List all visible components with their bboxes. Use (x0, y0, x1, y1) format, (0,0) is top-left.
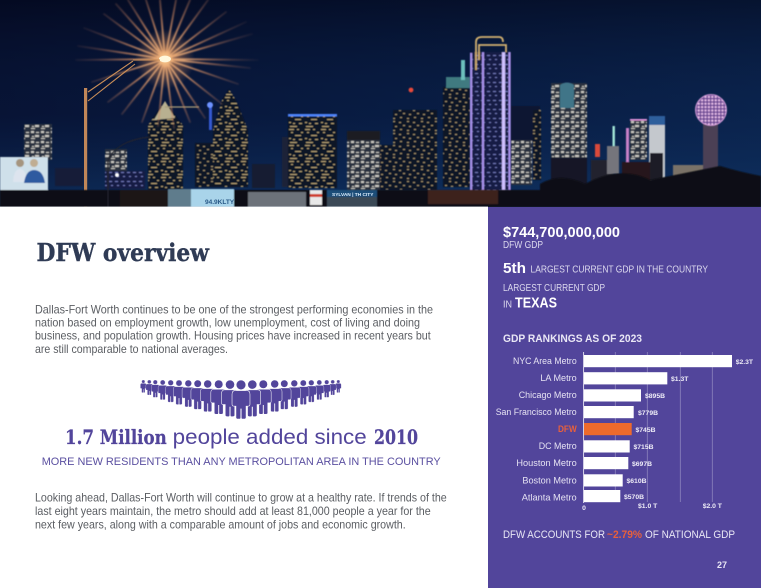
bar chart: GDP rankings: DC Metro (539, 441, 577, 452)
heading: population added: 2010 (374, 425, 418, 449)
bar chart: GDP rankings: $697B (632, 461, 652, 468)
left skyline buildings (24, 60, 718, 193)
callout: share of national GDP (503, 529, 735, 541)
heading: population added: people added since (173, 426, 367, 449)
panel: purple GDP sidebar (488, 207, 761, 588)
bar chart: GDP rankings: San Francisco Metro (496, 407, 577, 418)
billboard lettering: 94.9KLTY (205, 199, 235, 206)
stat: largest in Texas: TEXAS (515, 296, 557, 312)
street lamp with starburst (76, 0, 258, 207)
main tower with purple outline (470, 37, 511, 204)
text block: intro paragraph: Dallas-Fort Worth continues to be one of the strongest performing economies in the (35, 302, 433, 316)
stat: 5th largest in country (503, 261, 708, 277)
stat: total GDP: $744,700,000,000 (503, 225, 620, 241)
bar chart: GDP rankings: LA Metro (540, 373, 577, 384)
bar chart: GDP rankings: $610B (626, 478, 647, 485)
bar chart: GDP rankings: $1.3T (671, 376, 689, 383)
callout: share of national GDP: DFW ACCOUNTS FOR (503, 529, 605, 541)
stat: largest in Texas (503, 283, 605, 312)
text block: outlook paragraph (35, 491, 447, 531)
bar chart: GDP rankings: 0 (582, 505, 586, 512)
callout: share of national GDP: OF NATIONAL GDP (645, 529, 735, 541)
text block: outlook paragraph: next few years, along with a comparable amount of jobs and economic growth. (35, 517, 406, 531)
stat: total GDP (503, 225, 620, 251)
bar chart: GDP rankings: $2.3T (736, 359, 754, 366)
text block: outlook paragraph: Looking ahead, Dallas-Fort Worth will continue to grow at a healthy rate. If trends of the (35, 491, 447, 505)
bar chart: GDP rankings: $2.0 T (703, 503, 723, 510)
billboard lettering: SYLVAN | TH CITY (332, 192, 374, 198)
bar chart: GDP rankings: $1.0 T (638, 503, 658, 510)
heading: population added (65, 425, 418, 449)
bar chart: GDP rankings: $895B (645, 393, 665, 400)
bar chart: GDP rankings: $779B (638, 410, 658, 417)
text block: intro paragraph: nation based on employment growth, low unemployment, cost of living and doing (35, 315, 420, 329)
bar chart: GDP rankings (496, 352, 754, 512)
page number: 27 (717, 560, 727, 570)
callout: share of national GDP: ~2.79% (607, 529, 643, 541)
stat: 5th largest in country: LARGEST CURRENT GDP IN THE COUNTRY (530, 265, 708, 276)
bar chart: GDP rankings: Chicago Metro (519, 390, 577, 401)
photo: Dallas skyline at night (0, 0, 761, 208)
bar chart: GDP rankings: Atlanta Metro (522, 492, 577, 504)
stat: largest in Texas: IN (503, 300, 512, 310)
text block: outlook paragraph: last eight years maintain, the metro should add at least 81,000 people a year for the (35, 504, 431, 518)
icon: crowd of people (140, 380, 341, 419)
billboard lettering (205, 192, 374, 206)
stat: total GDP: DFW GDP (503, 240, 543, 251)
Reunion Tower (696, 94, 726, 126)
bar chart: GDP rankings: DFW (558, 424, 578, 435)
billboards and foreground (0, 137, 761, 207)
bar chart: GDP rankings: NYC Area Metro (513, 356, 577, 367)
subheading: new residents: MORE NEW RESIDENTS THAN ANY METROPOLITAN AREA IN THE COUNTRY (42, 456, 441, 468)
stat: 5th largest in country: 5th (503, 261, 526, 277)
text block: intro paragraph: business, and population growth. Housing prices have increased in recent years but (35, 329, 431, 343)
bar chart: GDP rankings: $745B (636, 427, 656, 434)
bar chart: GDP rankings: Houston Metro (516, 458, 577, 469)
bar chart: GDP rankings: $715B (634, 444, 654, 451)
stat: largest in Texas: LARGEST CURRENT GDP (503, 283, 605, 294)
text block: intro paragraph: are still comparable to national averages. (35, 342, 228, 356)
title: DFW overview (36, 238, 210, 267)
bar chart: GDP rankings: $570B (624, 494, 644, 501)
heading: population added: 1.7 Million (65, 425, 167, 449)
bar chart: GDP rankings: Boston Metro (522, 475, 577, 486)
chart heading: GDP RANKINGS AS OF 2023 (503, 333, 642, 345)
text block: intro paragraph (35, 302, 433, 356)
